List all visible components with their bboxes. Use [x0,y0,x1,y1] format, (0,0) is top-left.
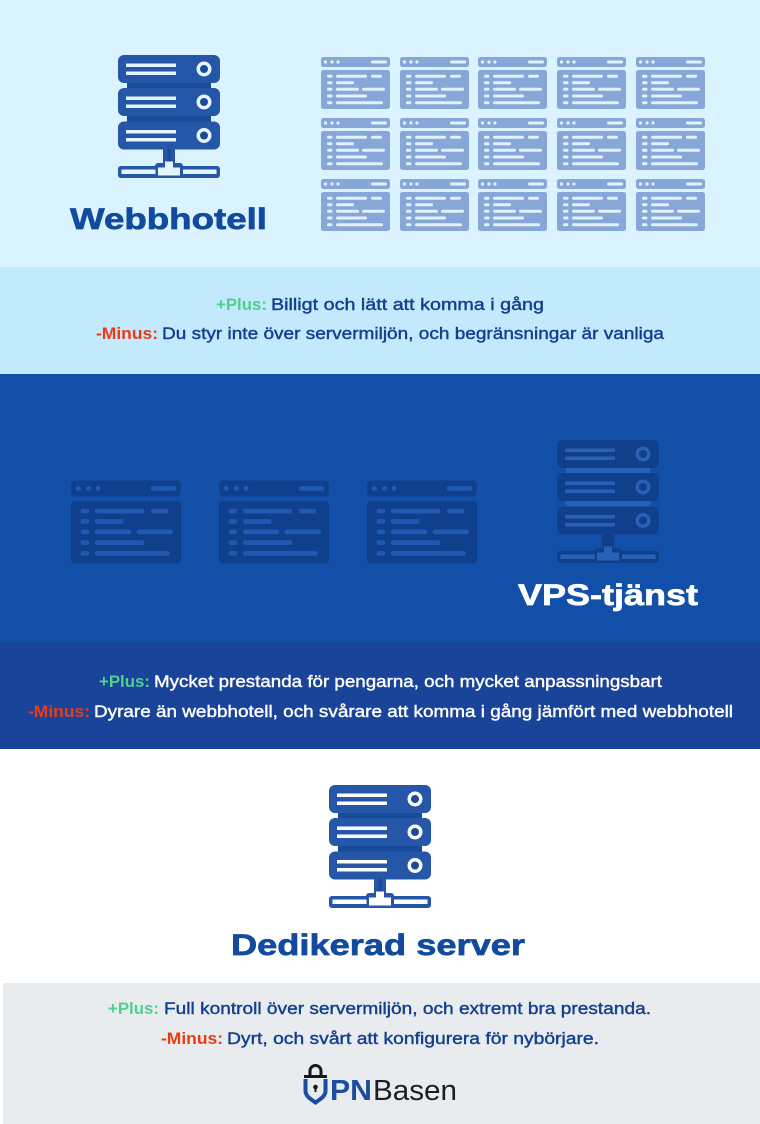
heading: Dedikerad server: Dedikerad server [231,929,525,962]
heading: Webbhotell: Webbhotell [70,203,267,236]
plus text: Full kontroll över servermiljön, och extremt bra prestanda. [164,1000,651,1018]
plus text: +Plus: [99,673,150,691]
icon: shield lock [304,1066,327,1102]
wordmark: PN: PN [330,1075,372,1107]
wordmark: Basen: Basen [373,1075,457,1107]
icon: server [557,440,659,563]
panel: VPS pros and cons [0,642,760,749]
isolated virtual sites [71,480,477,563]
minus text: -Minus: [28,703,90,721]
grid of shared sites [321,57,705,231]
panel: VPS-tjänst [0,374,760,642]
plus text: +Plus: [216,296,267,314]
heading: VPS-tjänst: VPS-tjänst [518,579,698,612]
minus text: Du styr inte över servermiljön, och begränsningar är vanliga [162,325,665,343]
icon: server [118,55,220,178]
minus text: Dyrare än webbhotell, och svårare att komma i gång jämfört med webbhotell [94,703,733,721]
minus text: -Minus: [161,1030,223,1048]
icon: server [329,785,431,908]
logo: VPNBasen [304,1066,457,1107]
panel: Dedikerad server pros and cons [3,983,760,1124]
panel: Webbhotell [0,0,760,267]
plus text: Mycket prestanda för pengarna, och mycket anpassningsbart [154,673,662,691]
panel: Webbhotell pros and cons [0,267,760,374]
panel: Dedikerad server [0,749,760,983]
plus text [216,296,544,314]
plus text: +Plus: [108,1000,159,1018]
minus text: -Minus: [96,325,158,343]
minus text: Dyrt, och svårt att konfigurera för nybörjare. [227,1030,599,1048]
plus text: Billigt och lätt att komma i gång [271,296,544,314]
